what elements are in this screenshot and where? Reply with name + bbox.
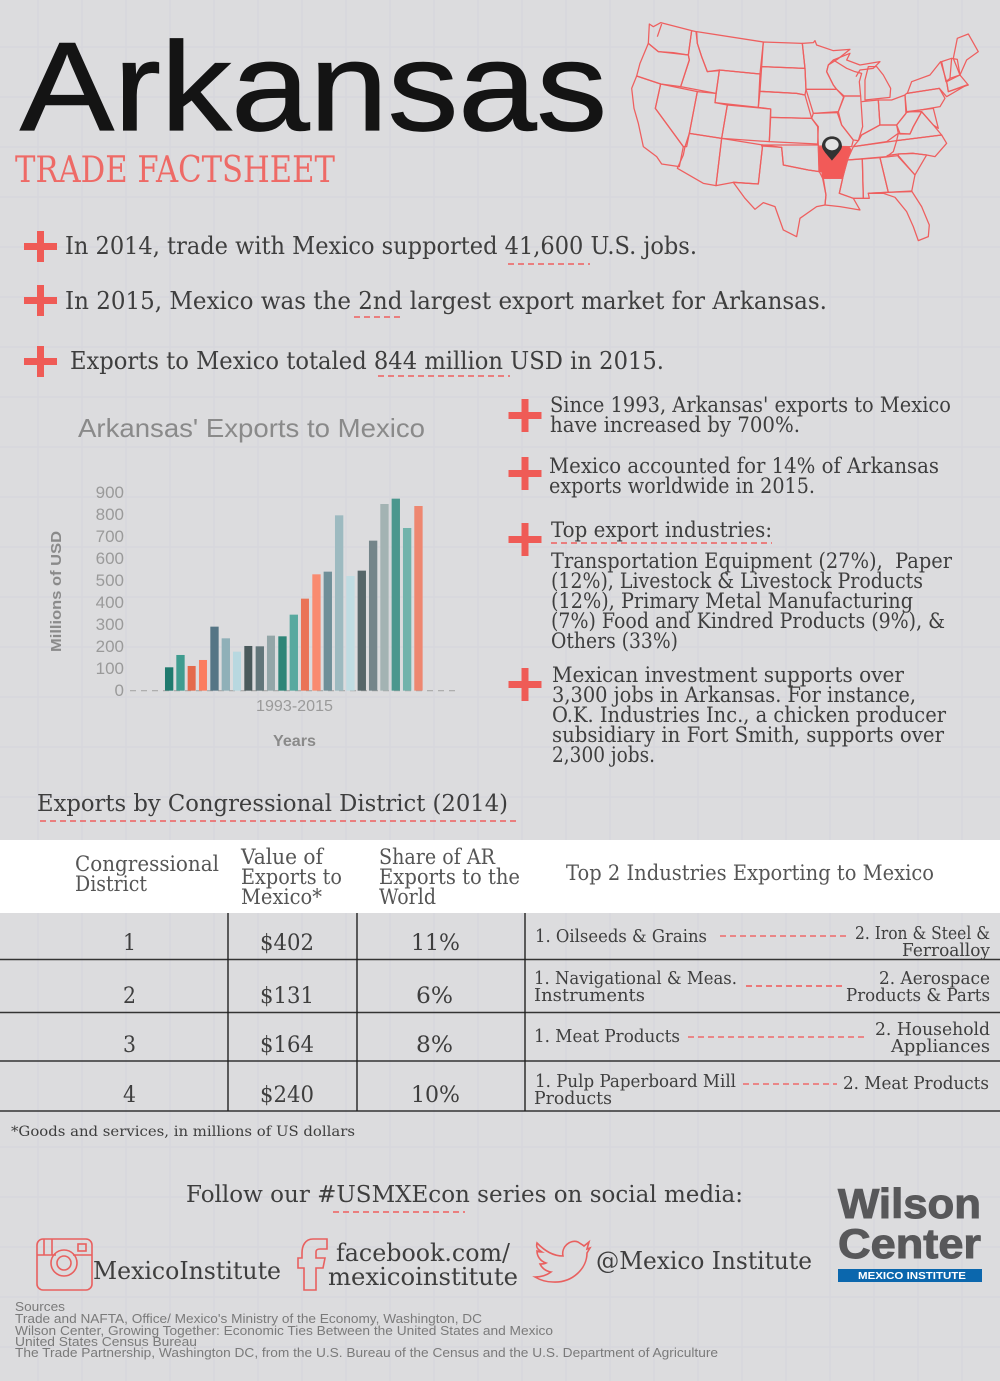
bars — [165, 499, 423, 691]
table: exports by congressional district — [0, 840, 1000, 1111]
row 1: Ferroalloy — [902, 940, 991, 961]
sources: Wilson Center, Growing Together: Economic Ties Between the United States and Mexico — [15, 1323, 553, 1338]
facebook handle: mexicoinstitute — [328, 1263, 518, 1291]
row 4: Products — [534, 1088, 612, 1109]
table header: Value of — [240, 845, 325, 869]
fact: top export industries: Transportation Equipment (27%), Paper — [551, 549, 953, 573]
row 2: Instruments — [534, 985, 645, 1006]
icon: facebook — [298, 1239, 327, 1290]
table header: Share of AR — [379, 845, 496, 869]
y axis labels: 0 — [115, 681, 124, 700]
logo: Wilson Center: Center — [838, 1220, 981, 1267]
state: Arkansas highlighted — [818, 147, 851, 178]
bullet 3: Exports to Mexico totaled 844 million USD in 2015. — [70, 347, 664, 375]
fact: top export industries: Top export industries: — [551, 518, 772, 542]
y axis labels: 400 — [96, 593, 124, 612]
icon: map pin — [822, 136, 842, 161]
table header: Top 2 Industries Exporting to Mexico — [566, 861, 934, 885]
bullet 2: In 2015, Mexico was the 2nd largest export market for Arkansas. — [65, 287, 827, 315]
fact: 14 percent: Mexico accounted for 14% of Arkansas — [549, 454, 939, 478]
icon: twitter — [535, 1241, 590, 1282]
title: Arkansas — [20, 16, 607, 157]
row 2: 1. Navigational & Meas. — [534, 968, 737, 989]
fact: Mexican investment: Mexican investment supports over — [552, 663, 905, 687]
sources: United States Census Bureau — [15, 1334, 197, 1349]
y axis labels: 700 — [96, 527, 124, 546]
bar chart: exports 1993-2015 — [48, 483, 460, 750]
icon: instagram — [37, 1239, 92, 1290]
x axis label: 1993-2015 — [256, 698, 333, 715]
row 4: 4 — [123, 1083, 136, 1108]
row 1: 1 — [123, 931, 136, 956]
row 4: 2. Meat Products — [843, 1073, 989, 1094]
y axis title: Millions of USD — [48, 531, 65, 652]
row 2: $131 — [260, 984, 314, 1009]
row 2 — [123, 968, 990, 1009]
fact: Mexican investment: 3,300 jobs in Arkansas. For instance, — [552, 683, 916, 707]
footnote: *Goods and services, in millions of US dollars — [11, 1124, 355, 1140]
subtitle: TRADE FACTSHEET — [15, 150, 335, 191]
y axis labels: 500 — [96, 571, 124, 590]
fact: Mexican investment: O.K. Industries Inc., a chicken producer — [552, 703, 947, 727]
twitter handle: @Mexico Institute — [596, 1247, 812, 1275]
sources: Sources — [15, 1299, 66, 1314]
row 4: $240 — [260, 1083, 314, 1108]
logo: Wilson Center: Wilson — [838, 1180, 981, 1227]
fact: Mexican investment: subsidiary in Fort Smith, supports over — [552, 723, 945, 747]
row 1: 1. Oilseeds & Grains — [535, 926, 707, 947]
sources: The Trade Partnership, Washington DC, from the U.S. Bureau of the Census and the U.S. Department of Agriculture — [15, 1345, 718, 1360]
row 2: 2 — [123, 984, 136, 1009]
row 2: Products & Parts — [846, 985, 990, 1006]
y axis labels: 200 — [96, 637, 124, 656]
table header: Exports to the — [379, 865, 520, 889]
map: United States with Arkansas highlighted — [632, 23, 978, 241]
fact: top export industries: (12%), Livestock & Livestock Products — [551, 569, 923, 593]
y axis labels: 900 — [96, 483, 124, 502]
fact: Mexican investment: 2,300 jobs. — [552, 743, 655, 767]
y axis labels: 600 — [96, 549, 124, 568]
row 3: 3 — [123, 1033, 136, 1058]
fact: top export industries: (7%) Food and Kindred Products (9%), & — [551, 609, 945, 633]
row 4: 1. Pulp Paperboard Mill — [535, 1071, 736, 1092]
row 2: 2. Aerospace — [879, 968, 990, 989]
row 3: 1. Meat Products — [534, 1026, 680, 1047]
fact: since 1993 — [508, 393, 951, 437]
row 1: 11% — [411, 931, 460, 956]
y axis labels: 800 — [96, 505, 124, 524]
y axis labels: 100 — [96, 659, 124, 678]
chart title: Arkansas' Exports to Mexico — [78, 413, 425, 443]
fact: top export industries: (12%), Primary Metal Manufacturing — [551, 589, 913, 613]
table header — [0, 840, 1000, 913]
table header: Congressional — [75, 852, 219, 876]
fact: 14 percent: exports worldwide in 2015. — [549, 474, 815, 498]
bullet 1: In 2014, trade with Mexico supported 41,600 U.S. jobs. — [65, 232, 697, 260]
row 4 — [123, 1071, 989, 1109]
row 3: 2. Household — [875, 1019, 990, 1040]
facebook handle — [328, 1239, 518, 1291]
sources — [15, 1299, 718, 1360]
social heading: Follow our #USMXEcon series on social media: — [186, 1182, 743, 1208]
table header: Mexico* — [241, 885, 322, 909]
fact: 14 percent — [508, 454, 939, 498]
facebook handle: facebook.com/ — [336, 1239, 511, 1267]
table header: Exports to — [241, 865, 342, 889]
row 1: $402 — [260, 931, 314, 956]
x axis title: Years — [273, 733, 316, 750]
table header: World — [379, 885, 436, 909]
row 2: 6% — [416, 984, 453, 1009]
logo: Wilson Center: MEXICO INSTITUTE — [858, 1271, 966, 1282]
table header: District — [75, 872, 147, 896]
fact: Mexican investment — [508, 663, 947, 767]
row 1 — [123, 923, 991, 961]
fact: since 1993: Since 1993, Arkansas' exports to Mexico — [550, 393, 951, 417]
instagram handle: MexicoInstitute — [93, 1257, 281, 1285]
row 3: $164 — [260, 1033, 314, 1058]
y axis labels — [96, 483, 124, 700]
fact: top export industries — [508, 518, 953, 653]
logo: Wilson Center — [838, 1180, 982, 1282]
row 3: Appliances — [890, 1036, 990, 1057]
sources: Trade and NAFTA, Office/ Mexico's Ministry of the Economy, Washington, DC — [15, 1311, 482, 1326]
row 3: 8% — [416, 1033, 453, 1058]
row 3 — [123, 1019, 990, 1058]
table heading: Exports by Congressional District (2014) — [37, 791, 508, 817]
row 4: 10% — [411, 1083, 460, 1108]
y axis labels: 300 — [96, 615, 124, 634]
fact: top export industries: Others (33%) — [551, 629, 678, 653]
fact: since 1993: have increased by 700%. — [550, 413, 800, 437]
